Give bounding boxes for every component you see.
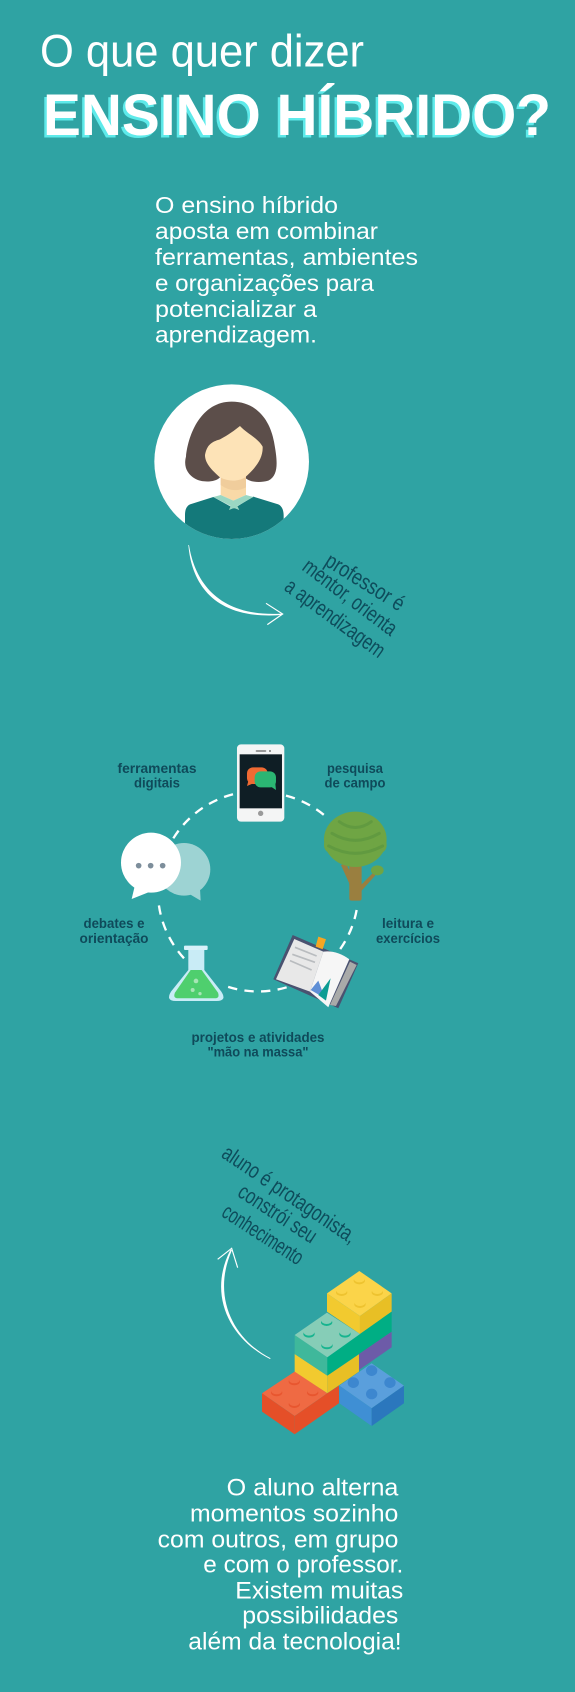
labels: cycle activities: pesquisa	[327, 760, 383, 776]
intro paragraph: potencializar a	[155, 296, 318, 322]
handwritten note: teacher: mentor, orienta	[298, 553, 403, 641]
intro paragraph: O ensino híbrido	[155, 192, 338, 218]
handwritten note: teacher: a aprendizagem	[280, 573, 390, 663]
title	[40, 26, 551, 150]
dashed cycle	[158, 793, 357, 991]
icon: speech bubbles	[121, 833, 210, 901]
handwritten note: student: conhecimento	[218, 1199, 308, 1270]
intro paragraph	[155, 192, 418, 348]
closing paragraph: momentos sozinho	[190, 1501, 398, 1528]
labels: cycle activities: exercícios	[376, 930, 440, 946]
intro paragraph: e organizações para	[155, 270, 375, 296]
icon: tree	[324, 812, 387, 901]
labels: cycle activities	[80, 760, 440, 1060]
closing paragraph: com outros, em grupo	[158, 1526, 398, 1553]
arrow: teacher to note	[188, 545, 283, 625]
labels: cycle activities: projetos e atividades	[192, 1029, 325, 1045]
handwritten note: teacher: professor é	[321, 548, 410, 616]
arrow: blocks to note	[218, 1248, 271, 1359]
intro paragraph: aposta em combinar	[155, 218, 378, 244]
handwritten note: student: constrói seu	[234, 1179, 322, 1248]
closing paragraph: O aluno alterna	[227, 1475, 399, 1502]
intro paragraph: ferramentas, ambientes	[155, 244, 418, 270]
title line 1: O que quer dizer	[40, 26, 364, 76]
closing paragraph: possibilidades	[242, 1603, 398, 1630]
closing paragraph: Existem muitas	[235, 1577, 403, 1604]
icon: flask	[169, 946, 223, 1001]
labels: cycle activities: de campo	[324, 774, 386, 790]
closing paragraph	[158, 1475, 403, 1655]
labels: cycle activities: ferramentas	[118, 760, 197, 776]
closing paragraph: e com o professor.	[203, 1552, 403, 1579]
icon: teacher avatar	[154, 384, 309, 543]
icon: book	[273, 935, 358, 1008]
labels: cycle activities: leitura e	[382, 915, 434, 931]
title line 2: ENSINO HÍBRIDO?	[40, 86, 548, 150]
icon: lego blocks	[262, 1271, 404, 1434]
labels: cycle activities: debates e	[84, 915, 145, 931]
title line 2: ENSINO HÍBRIDO?	[43, 83, 551, 148]
labels: cycle activities: orientação	[80, 930, 148, 946]
labels: cycle activities: digitais	[134, 774, 180, 790]
closing paragraph: além da tecnologia!	[188, 1628, 402, 1655]
handwritten note: student: aluno é protagonista,	[218, 1140, 362, 1248]
intro paragraph: aprendizagem.	[155, 322, 317, 348]
labels: cycle activities: "mão na massa"	[208, 1044, 308, 1060]
icon: smartphone	[237, 744, 284, 822]
